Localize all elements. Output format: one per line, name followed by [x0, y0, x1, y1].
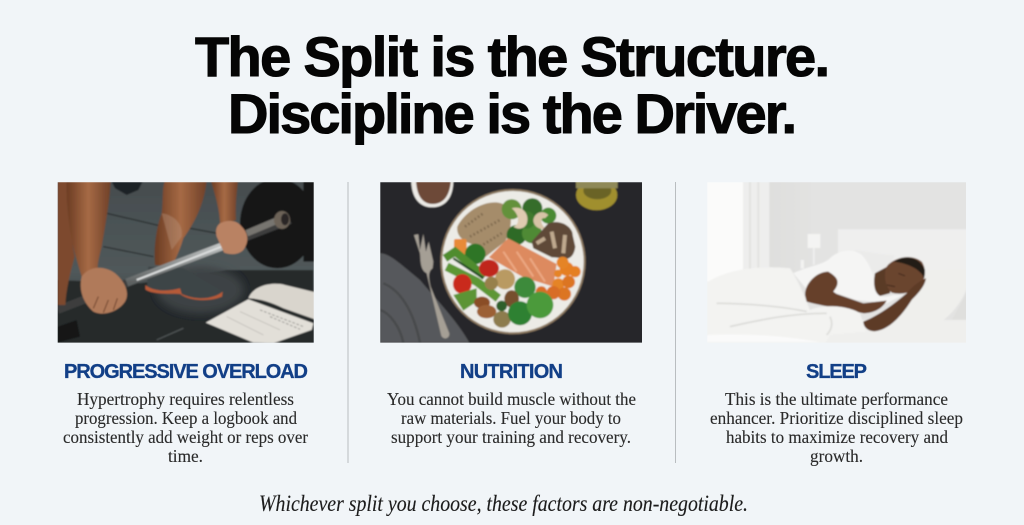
- napkin: [380, 253, 469, 343]
- upper arm on pillow: [863, 278, 926, 331]
- panel: nutrition: [375, 178, 647, 447]
- sleeve: [111, 180, 143, 195]
- right arm and hand: [211, 180, 238, 225]
- far leg: [155, 180, 207, 267]
- weight plate: [240, 178, 315, 268]
- plate: [440, 189, 586, 334]
- panel: sleep: [702, 178, 972, 466]
- title: Discipline is the Driver.: [228, 82, 797, 145]
- headboard: [838, 229, 971, 283]
- logbook: [248, 284, 317, 320]
- left vegetables: [465, 244, 486, 264]
- text: nutrition body: You cannot build muscle without the: [387, 389, 636, 409]
- text: sleep body: growth.: [810, 446, 863, 466]
- title: [195, 25, 830, 145]
- title: The Split is the Structure.: [195, 25, 830, 88]
- lower arm: [805, 272, 887, 313]
- heading: sleep: SLEEP: [806, 361, 867, 383]
- text: progressive overload body: Hypertrophy requires relentless: [77, 389, 294, 409]
- lamp: [808, 234, 820, 248]
- text: sleep body: This is the ultimate performance: [725, 389, 948, 409]
- text: progressive overload body: progression. Keep a logbook and: [75, 408, 297, 428]
- broccoli top: [502, 199, 522, 219]
- seed bowl: [411, 180, 453, 207]
- shoes: [147, 267, 222, 300]
- text: nutrition body: support your training and recovery.: [391, 427, 631, 447]
- fork: [414, 234, 449, 338]
- panel: progressive overload: [53, 178, 320, 466]
- carrots: [454, 239, 467, 257]
- photo: plate of salmon and vegetables: [380, 182, 642, 343]
- text: sleep body: [710, 389, 963, 466]
- shirt: [793, 251, 903, 303]
- footer statement: Whichever split you choose, these factors are non-negotiable.: [259, 491, 748, 517]
- left arm and hand: [66, 180, 111, 277]
- oil glass: [576, 180, 617, 210]
- text: nutrition body: [387, 389, 636, 447]
- heading: progressive overload: PROGRESSIVE OVERLOAD: [64, 361, 308, 383]
- text: progressive overload body: consistently add weight or reps over: [63, 427, 308, 447]
- text: sleep body: enhancer. Prioritize disciplined sleep: [710, 408, 963, 428]
- mushrooms: [512, 208, 528, 229]
- text: progressive overload body: [63, 389, 308, 466]
- duvet: [702, 267, 866, 347]
- neck: [874, 263, 893, 296]
- photo: barbell lift with logbook: [58, 182, 314, 343]
- text: sleep body: habits to maximize recovery and: [726, 427, 948, 447]
- heading: nutrition: NUTRITION: [460, 361, 563, 383]
- front pillow: [893, 269, 968, 327]
- text: nutrition body: raw materials. Fuel your body to: [401, 408, 621, 428]
- bed sheet: [702, 320, 972, 348]
- salmon: [489, 238, 557, 287]
- text: progressive overload body: time.: [168, 446, 203, 466]
- back pillow: [855, 250, 895, 273]
- head: [885, 257, 925, 294]
- photo: man sleeping in white bed: [708, 182, 966, 342]
- grains: [457, 202, 511, 257]
- curtain: [702, 178, 743, 282]
- barbell: [58, 220, 290, 310]
